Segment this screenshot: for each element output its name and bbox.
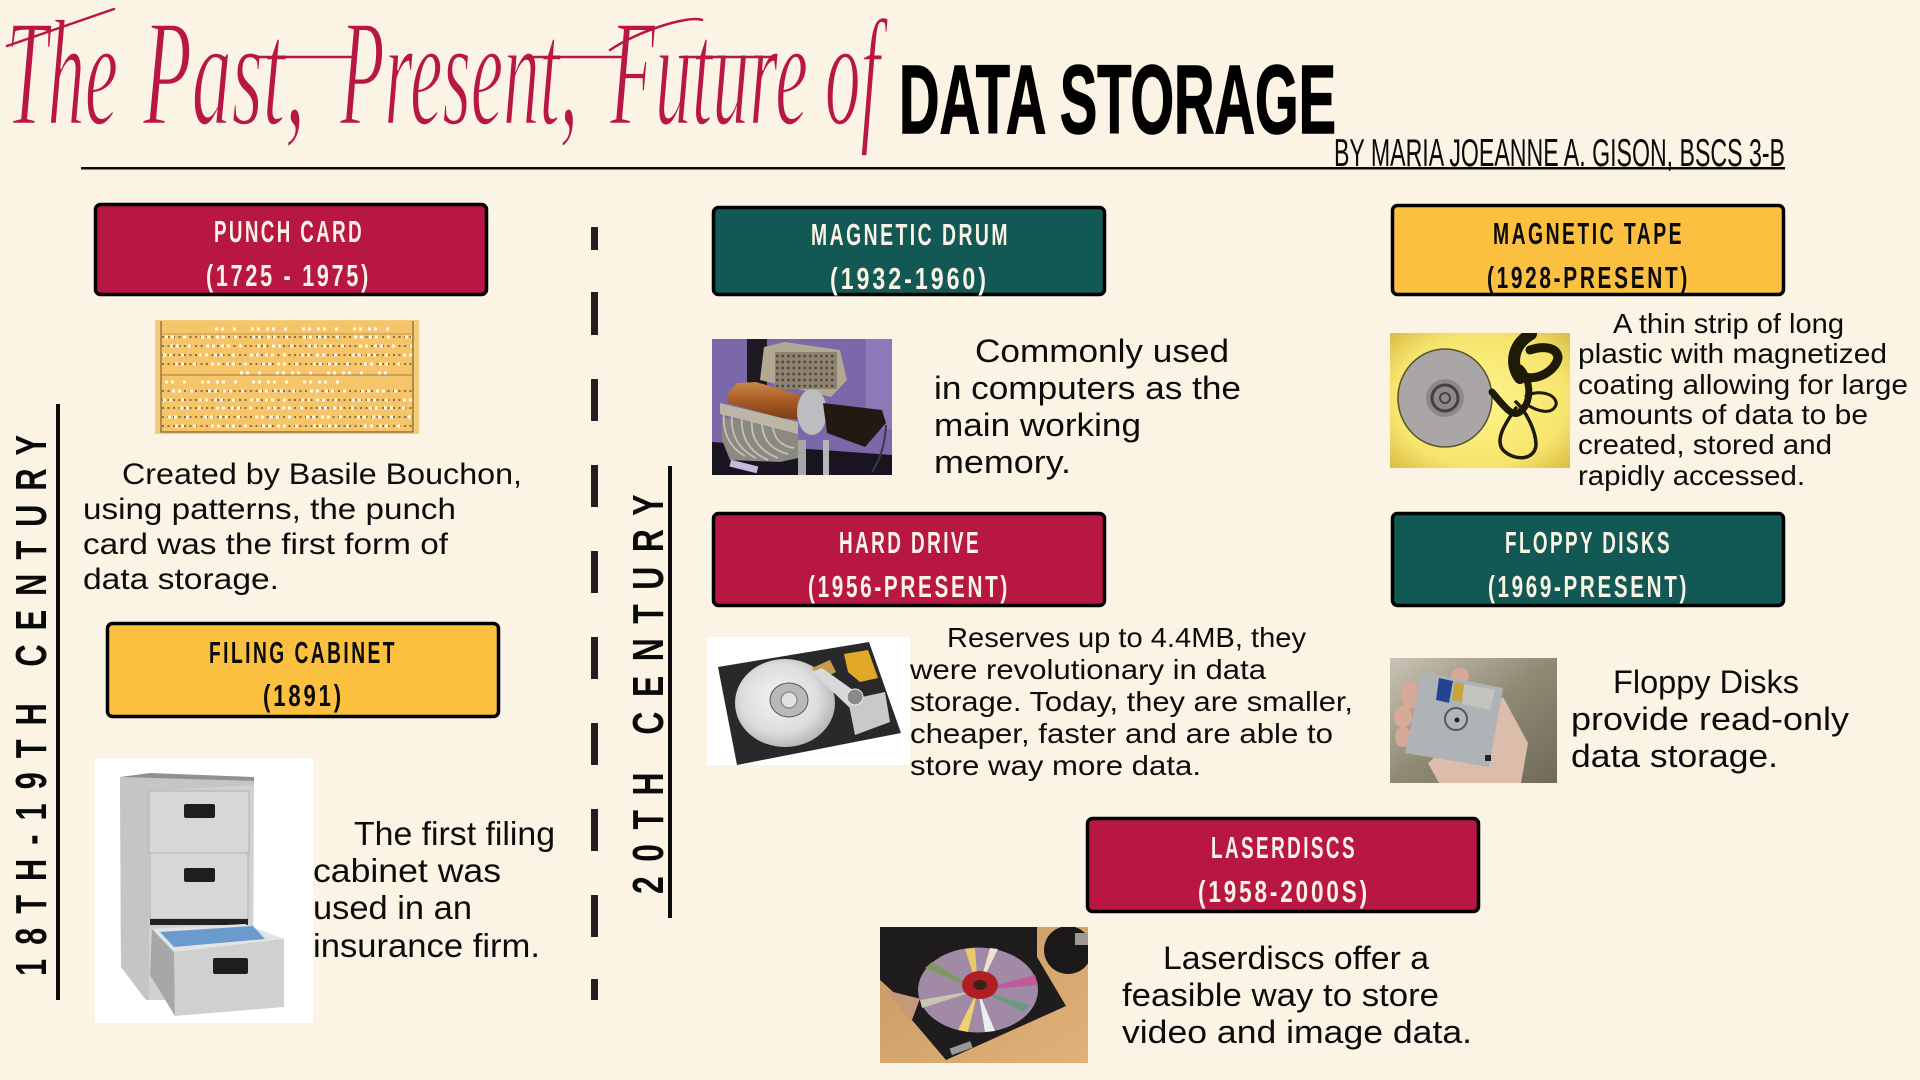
image: filing cabinet <box>95 758 313 1023</box>
panel header: floppy disks: (1969-PRESENT) <box>1488 569 1689 604</box>
text: magnetic tape description: A thin strip of long <box>1613 308 1844 339</box>
image: floppy disk in hand <box>1390 658 1557 783</box>
text: laserdiscs description: video and image data. <box>1122 1014 1472 1050</box>
text: floppy disks description: Floppy Disks <box>1613 664 1799 700</box>
text: magnetic drum description: in computers as the <box>934 370 1241 406</box>
text: laserdiscs description: feasible way to store <box>1122 977 1439 1013</box>
text: filing cabinet description: insurance firm. <box>313 927 540 964</box>
era label: 20th century: 20TH CENTURY <box>624 480 673 894</box>
text: magnetic drum description <box>934 333 1241 480</box>
text: magnetic drum description: memory. <box>934 444 1071 480</box>
text: punch card description: data storage. <box>83 563 279 596</box>
text: filing cabinet description <box>313 815 555 964</box>
text: laserdiscs description: Laserdiscs offer a <box>1163 940 1429 976</box>
text: magnetic drum description: Commonly used <box>975 333 1229 369</box>
panel header: magnetic tape: (1928-PRESENT) <box>1487 260 1690 295</box>
text: hard drive description: storage. Today, they are smaller, <box>910 686 1353 717</box>
text: punch card description: using patterns, the punch <box>83 493 456 526</box>
panel header: magnetic drum: (1932-1960) <box>830 261 989 296</box>
text: magnetic drum description: main working <box>934 407 1141 443</box>
panel header: laserdiscs: LASERDISCS <box>1211 830 1357 865</box>
text: filing cabinet description: cabinet was <box>313 852 501 889</box>
text: hard drive description: store way more data. <box>910 750 1201 781</box>
title script: The Past, Present, Future of <box>6 0 889 157</box>
text: punch card description <box>83 458 522 596</box>
text: magnetic tape description: plastic with magnetized <box>1578 338 1887 369</box>
text: magnetic tape description: coating allowing for large <box>1578 369 1908 400</box>
panel header: filing cabinet: (1891) <box>263 678 344 713</box>
text: magnetic tape description: amounts of data to be <box>1578 399 1868 430</box>
text: hard drive description <box>909 622 1353 781</box>
panel header: laserdiscs: (1958-2000S) <box>1198 874 1370 909</box>
text: punch card description: Created by Basile Bouchon, <box>122 458 522 491</box>
text: magnetic tape description: rapidly accessed. <box>1578 460 1805 491</box>
panel header: magnetic tape: MAGNETIC TAPE <box>1493 216 1684 251</box>
panel header: floppy disks <box>1392 514 1784 606</box>
panel header: filing cabinet: FILING CABINET <box>209 635 397 670</box>
panel header: punch card: PUNCH CARD <box>214 214 364 249</box>
panel header: magnetic drum: MAGNETIC DRUM <box>811 217 1010 252</box>
panel header: hard drive: HARD DRIVE <box>839 525 981 560</box>
image: magnetic tape reel <box>1390 333 1570 468</box>
era label: 18th-19th century <box>7 404 60 1000</box>
text: filing cabinet description: The first filing <box>354 815 555 852</box>
image: hard drive <box>707 637 910 765</box>
timeline dashed divider <box>591 227 598 1000</box>
panel header: punch card: (1725 - 1975) <box>206 258 371 293</box>
text: hard drive description: Reserves up to 4.4MB, they <box>947 622 1306 653</box>
image: laserdisc player <box>880 926 1092 1063</box>
text: floppy disks description: provide read-only <box>1571 701 1849 737</box>
text: punch card description: card was the first form of <box>83 528 449 561</box>
text: floppy disks description: data storage. <box>1571 738 1778 774</box>
text: floppy disks description <box>1571 664 1849 774</box>
text: hard drive description: were revolutionary in data <box>909 654 1266 685</box>
title bold: DATA STORAGE: DATA STORAGE <box>899 45 1336 154</box>
panel header: magnetic drum <box>714 208 1104 296</box>
text: laserdiscs description <box>1122 940 1472 1050</box>
panel header: floppy disks: FLOPPY DISKS <box>1505 525 1672 560</box>
text: magnetic tape description <box>1578 308 1908 491</box>
panel header: filing cabinet <box>108 624 498 716</box>
text: filing cabinet description: used in an <box>313 889 472 926</box>
panel header: hard drive <box>714 514 1104 606</box>
panel header: magnetic tape <box>1392 206 1784 295</box>
text: magnetic tape description: created, stored and <box>1578 429 1832 460</box>
panel header: punch card <box>96 204 486 294</box>
title underline <box>81 167 1785 170</box>
era label: 18th-19th century: 18TH-19TH CENTURY <box>7 421 56 976</box>
text: hard drive description: cheaper, faster and are able to <box>910 718 1333 749</box>
image: punch card <box>155 320 419 434</box>
panel header: laserdiscs <box>1088 818 1478 912</box>
panel header: hard drive: (1956-PRESENT) <box>808 569 1010 604</box>
image: magnetic drum <box>712 339 892 475</box>
